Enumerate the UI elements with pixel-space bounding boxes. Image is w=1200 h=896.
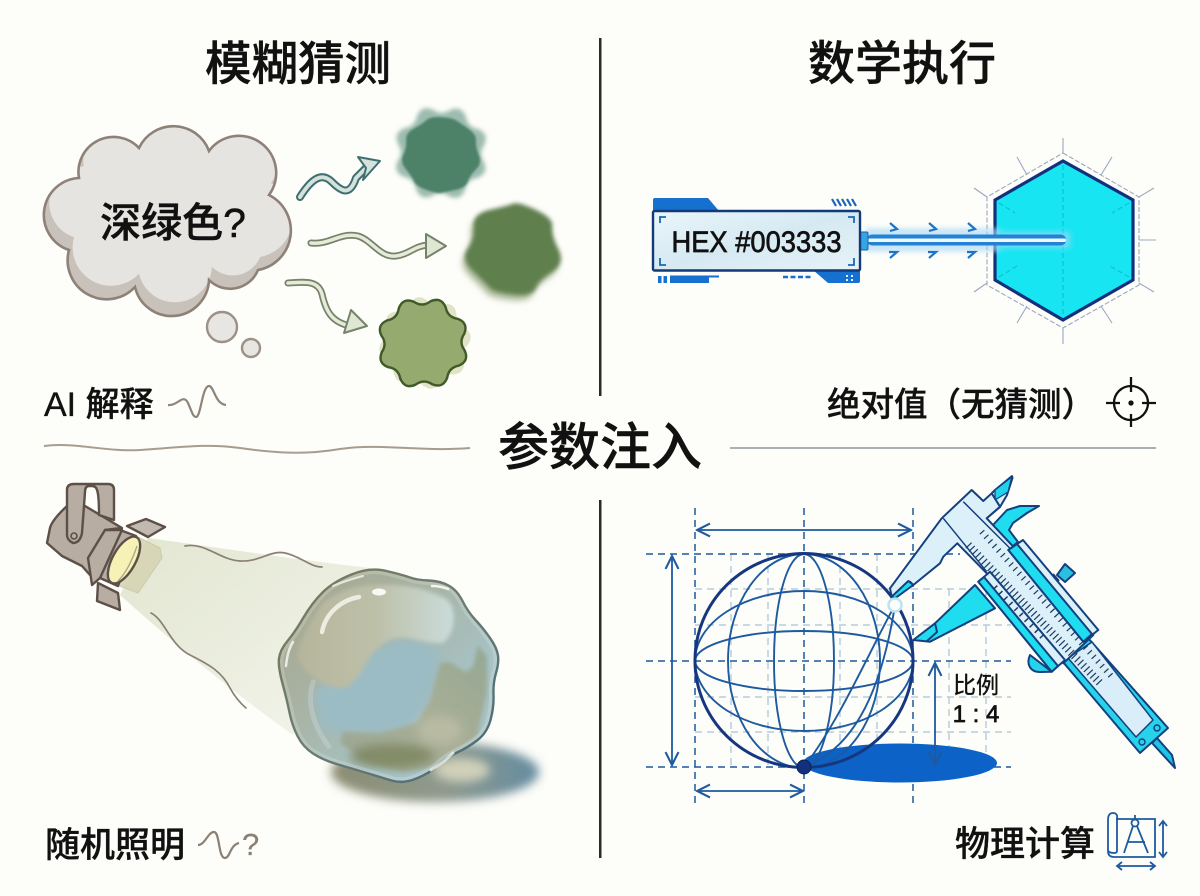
label: absolute value: 绝对值（无猜测） — [827, 387, 1095, 424]
label: random lighting: 随机照明 — [45, 826, 185, 865]
heading: fuzzy guess: 模糊猜测 — [205, 38, 391, 90]
caliper screws — [1154, 725, 1160, 731]
barn door side — [88, 530, 122, 585]
hexagon — [995, 161, 1133, 320]
hexagon guide lines — [974, 138, 1156, 344]
barrel — [100, 530, 136, 586]
thought bubble small — [242, 339, 260, 357]
thought bubble large — [207, 312, 237, 342]
spotlight yoke — [67, 484, 114, 543]
panel: fuzzy guess — [44, 97, 561, 424]
arrow: to olive blob — [311, 234, 446, 258]
arrow: to teal blob — [300, 157, 380, 197]
dimension arrows — [672, 530, 935, 791]
contact point — [888, 598, 902, 612]
lens — [101, 532, 147, 588]
caliper top small jaw tip — [995, 477, 1012, 500]
caliper lower slider — [978, 572, 1065, 672]
hex value tag — [653, 198, 860, 283]
ratio label: 1 : 4 — [953, 701, 999, 728]
caliper upper slider — [1008, 540, 1098, 642]
caliper needle — [1152, 738, 1175, 768]
caliper inner lines — [943, 502, 1012, 572]
light grid — [695, 554, 1011, 767]
ratio label: 比例 — [953, 672, 999, 698]
spotlight — [47, 484, 165, 610]
ratio label — [953, 672, 999, 728]
caliper top small jaw — [987, 476, 1012, 518]
heading: math execution: 数学执行 — [808, 37, 996, 90]
label: random lighting: ? — [242, 827, 259, 862]
thought cloud — [44, 115, 292, 316]
panel: random lighting — [45, 484, 539, 865]
icon: squiggle with question — [198, 832, 239, 858]
caliper scale ticks — [968, 545, 1100, 683]
light beam — [120, 538, 370, 735]
bubble shadow — [331, 742, 539, 802]
spotlight body — [47, 506, 122, 575]
divider: vertical top — [599, 38, 602, 396]
barn door bottom — [97, 583, 120, 610]
divider: vertical bottom — [599, 500, 602, 858]
icon: squiggle — [168, 386, 226, 417]
wireframe sphere — [695, 554, 913, 768]
spotlight hood — [106, 536, 162, 593]
arrow: to light green blob — [288, 282, 367, 333]
caliper head and beam — [890, 490, 1093, 663]
blob: blurred olive green — [463, 203, 561, 300]
barn door top — [127, 519, 165, 537]
beam wavy edges — [151, 545, 322, 708]
caliper vernier ticks — [995, 587, 1043, 638]
panel: math execution — [653, 138, 1156, 427]
bubble highlights — [286, 576, 453, 770]
blob: blurred teal green — [385, 97, 497, 209]
icon: blueprint compass — [1108, 813, 1167, 870]
caliper — [890, 476, 1175, 768]
divider: wavy left line — [44, 445, 470, 453]
caliper lower jaw — [913, 585, 995, 642]
blob: sharp light green — [365, 283, 485, 403]
caliper window — [1068, 642, 1153, 737]
cloud question text: 深绿色? — [100, 200, 246, 246]
divider: straight right line — [730, 447, 1156, 449]
caliper jaw tip — [892, 581, 913, 598]
chevrons — [889, 223, 975, 258]
pivot dot — [797, 760, 811, 774]
caliper knob — [1053, 564, 1075, 582]
label: AI interpretation: AI 解释 — [44, 386, 154, 424]
label: physical calculation: 物理计算 — [955, 825, 1095, 864]
label: AI interpretation — [44, 386, 226, 424]
beam — [860, 228, 1070, 252]
dashed guide lines — [646, 508, 1011, 808]
caliper thumb rest — [1028, 655, 1052, 672]
panel: physical calculation — [646, 476, 1175, 870]
icon: crosshair target — [1106, 377, 1156, 427]
glass bubble — [279, 570, 498, 782]
shadow ellipse — [803, 744, 997, 782]
hex value text: HEX #003333 — [672, 226, 842, 259]
caliper upper outer jaw — [993, 506, 1039, 550]
label: random lighting — [45, 826, 259, 865]
heading: parameter injection: 参数注入 — [498, 419, 702, 476]
caliper rear beam — [1063, 638, 1168, 753]
